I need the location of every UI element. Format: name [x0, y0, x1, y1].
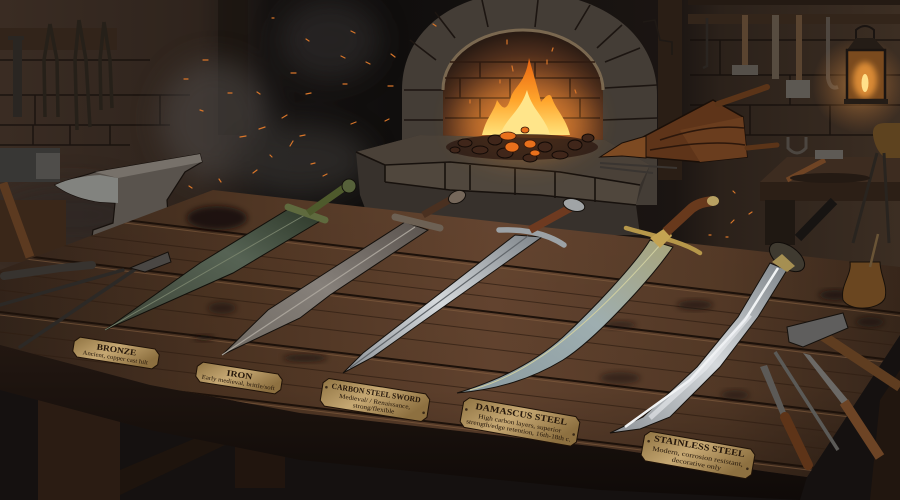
tools on right wall [643, 15, 838, 98]
plaque: iron: Early medieval, brittle/soft [201, 374, 276, 392]
left wall tongs and tools [0, 20, 117, 130]
table top [0, 190, 900, 500]
sword: iron [222, 188, 468, 355]
plaque: carbon steel sword [319, 378, 431, 422]
sword: bronze [105, 179, 356, 330]
fire and coals [446, 58, 598, 162]
plaque: carbon steel sword: Medieval/ / Renaissance, [339, 393, 411, 411]
plaque: damascus steel: strength/edge retention, 16th-18th c. [466, 418, 572, 444]
right foreground cup, hammer and files [760, 234, 900, 465]
sparks [184, 18, 752, 237]
plaque: bronze: Ancient, copper cast hilt [82, 350, 149, 367]
plaque: damascus steel [459, 397, 581, 447]
plaque: stainless steel: Modern, corrosion resistant, [652, 446, 744, 468]
forge hearth [356, 135, 650, 235]
plaque: stainless steel: decorative only [671, 457, 722, 472]
smoke [0, 0, 380, 245]
sword: damascus steel [457, 196, 719, 393]
plaque: carbon steel sword: CARBON STEEL SWORD [331, 382, 421, 405]
plaque: carbon steel sword: strong/flexible [352, 402, 395, 416]
plaque: damascus steel: High carbon layers, superior [478, 413, 563, 435]
plaque: damascus steel: DAMASCUS STEEL [475, 401, 568, 427]
left foreground rasp and tongs [0, 252, 171, 347]
coal pile and grime [187, 206, 884, 400]
sword: carbon steel [343, 196, 586, 373]
table legs [38, 370, 900, 500]
forge [356, 0, 657, 235]
plaque: bronze: BRONZE [96, 341, 137, 358]
lantern [812, 26, 900, 133]
plaque: stainless steel [640, 431, 756, 479]
plaque: bronze [72, 336, 160, 370]
sword: stainless steel [610, 201, 834, 433]
side bench with tools [760, 123, 900, 245]
bellows [600, 87, 777, 173]
anvil and stump [0, 148, 202, 262]
plaque: iron [195, 361, 283, 395]
plaque: stainless steel: STAINLESS STEEL [653, 433, 746, 459]
plaque: iron: IRON [226, 368, 254, 382]
